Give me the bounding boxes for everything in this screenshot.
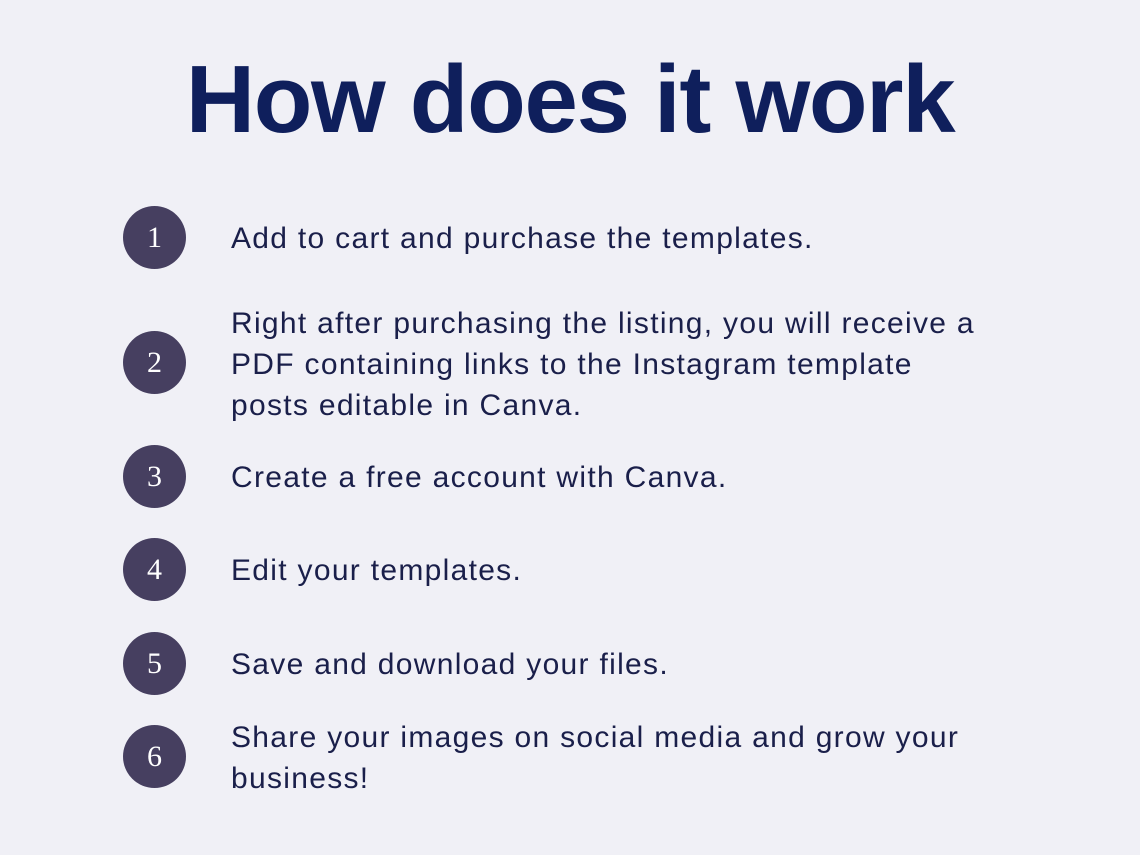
- step 5 number: [123, 632, 186, 695]
- step 4 number: [123, 538, 186, 601]
- step 6 text: Share your images on social media and grow your: [231, 721, 959, 754]
- step 2 number: [123, 331, 186, 394]
- step 6 text: business!: [231, 762, 369, 795]
- step 2 text: PDF containing links to the Instagram template: [231, 348, 913, 381]
- step 5 number: 5: [147, 647, 162, 680]
- step 2 text: Right after purchasing the listing, you will receive a: [231, 307, 975, 340]
- step 5 text: Save and download your files.: [231, 648, 669, 681]
- step 4 number: 4: [147, 553, 162, 586]
- step 3 text: Create a free account with Canva.: [231, 461, 727, 494]
- step 6 number: [123, 725, 186, 788]
- step 2 text: posts editable in Canva.: [231, 389, 582, 422]
- step 3 number: 3: [147, 460, 162, 493]
- step 6 number: 6: [147, 740, 162, 773]
- step 1 number: 1: [147, 221, 162, 254]
- step 4 text: Edit your templates.: [231, 554, 522, 587]
- step 1 text: Add to cart and purchase the templates.: [231, 222, 814, 255]
- step 3 number: [123, 445, 186, 508]
- step 2 number: 2: [147, 346, 162, 379]
- step 1 number: [123, 206, 186, 269]
- step 2 text: [231, 307, 975, 422]
- title: How does it work: [186, 46, 954, 153]
- step 6 text: [231, 721, 959, 795]
